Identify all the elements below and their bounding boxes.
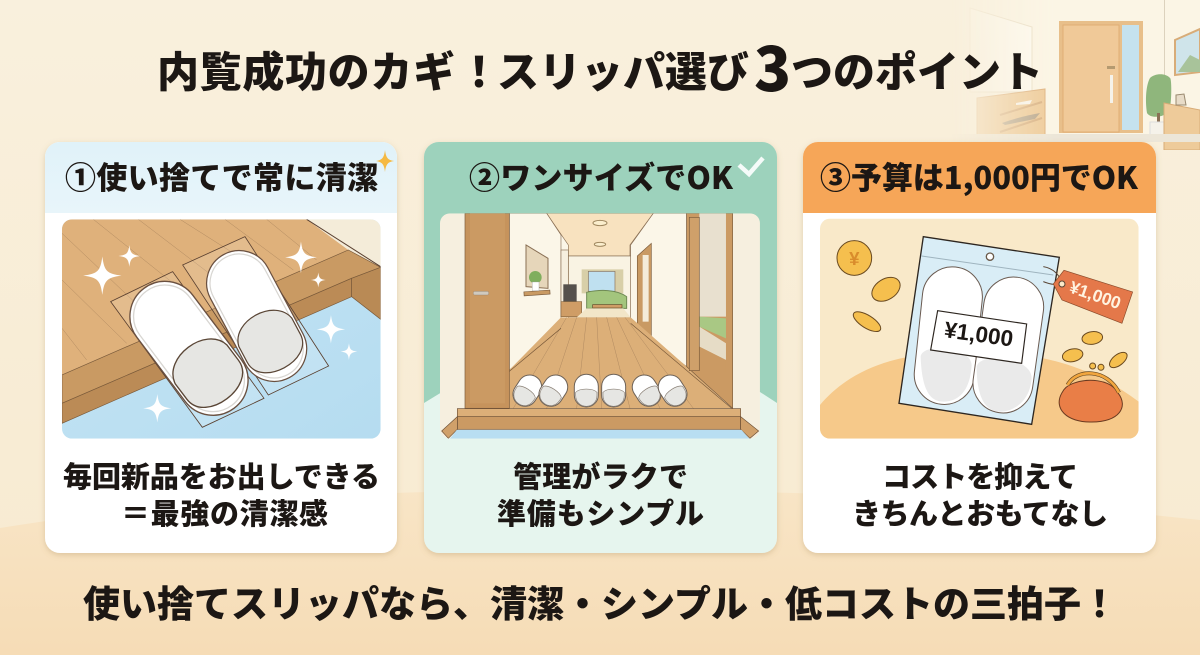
card 2 heading: ②ワンサイズでOK [469, 153, 734, 198]
title [157, 20, 1043, 109]
card 2 caption [497, 454, 704, 533]
bag [899, 237, 1059, 424]
title: つのポイント [791, 39, 1043, 100]
panel: card 3 budget [803, 142, 1156, 553]
title: 3 [754, 20, 791, 109]
title: 内覧成功のカギ [157, 39, 455, 100]
icon: gold sparkle [376, 150, 394, 172]
card 2 caption: 準備もシンプル [497, 491, 704, 533]
bottom summary: 使い捨てスリッパなら、清潔・シンプル・低コストの三拍子！ [83, 574, 1118, 628]
title: スリッパ選び [497, 39, 749, 100]
icon: check mark [739, 158, 763, 174]
panel: card 2 one size [424, 142, 777, 553]
card 1 caption [63, 454, 380, 533]
background room illustration [976, 0, 1200, 150]
card 3 caption: きちんとおもてなし [852, 491, 1108, 533]
card 3 caption [852, 454, 1108, 533]
panel: card 1 clean [45, 142, 397, 553]
coins [837, 241, 1130, 371]
label [931, 311, 1027, 363]
card 1 heading: ①使い捨てで常に清潔 [65, 153, 378, 198]
purse [1059, 380, 1122, 422]
illustration: packaged slippers on entry step [62, 219, 381, 439]
illustration: packaged slippers with price: ¥1,000 [1067, 277, 1124, 313]
card 3 heading: ③予算は1,000円でOK [820, 153, 1139, 198]
illustration: packaged slippers with price: ¥1,000 [943, 316, 1015, 352]
illustration: packaged slippers with price: ¥ [849, 248, 860, 269]
card 1 caption: ＝最強の清潔感 [121, 491, 328, 533]
card 3 caption: コストを抑えて [882, 454, 1078, 496]
tag [1043, 267, 1062, 284]
card 1 caption: 毎回新品をお出しできる [63, 454, 380, 496]
card 1 header band [45, 142, 397, 213]
illustration: hallway with slippers [440, 213, 760, 439]
card 3 header band [803, 142, 1156, 213]
illustration: packaged slippers with price [820, 219, 1139, 439]
card 2 header band [424, 142, 777, 403]
card 2 caption: 管理がラクで [513, 454, 688, 496]
title: ！ [458, 39, 500, 100]
